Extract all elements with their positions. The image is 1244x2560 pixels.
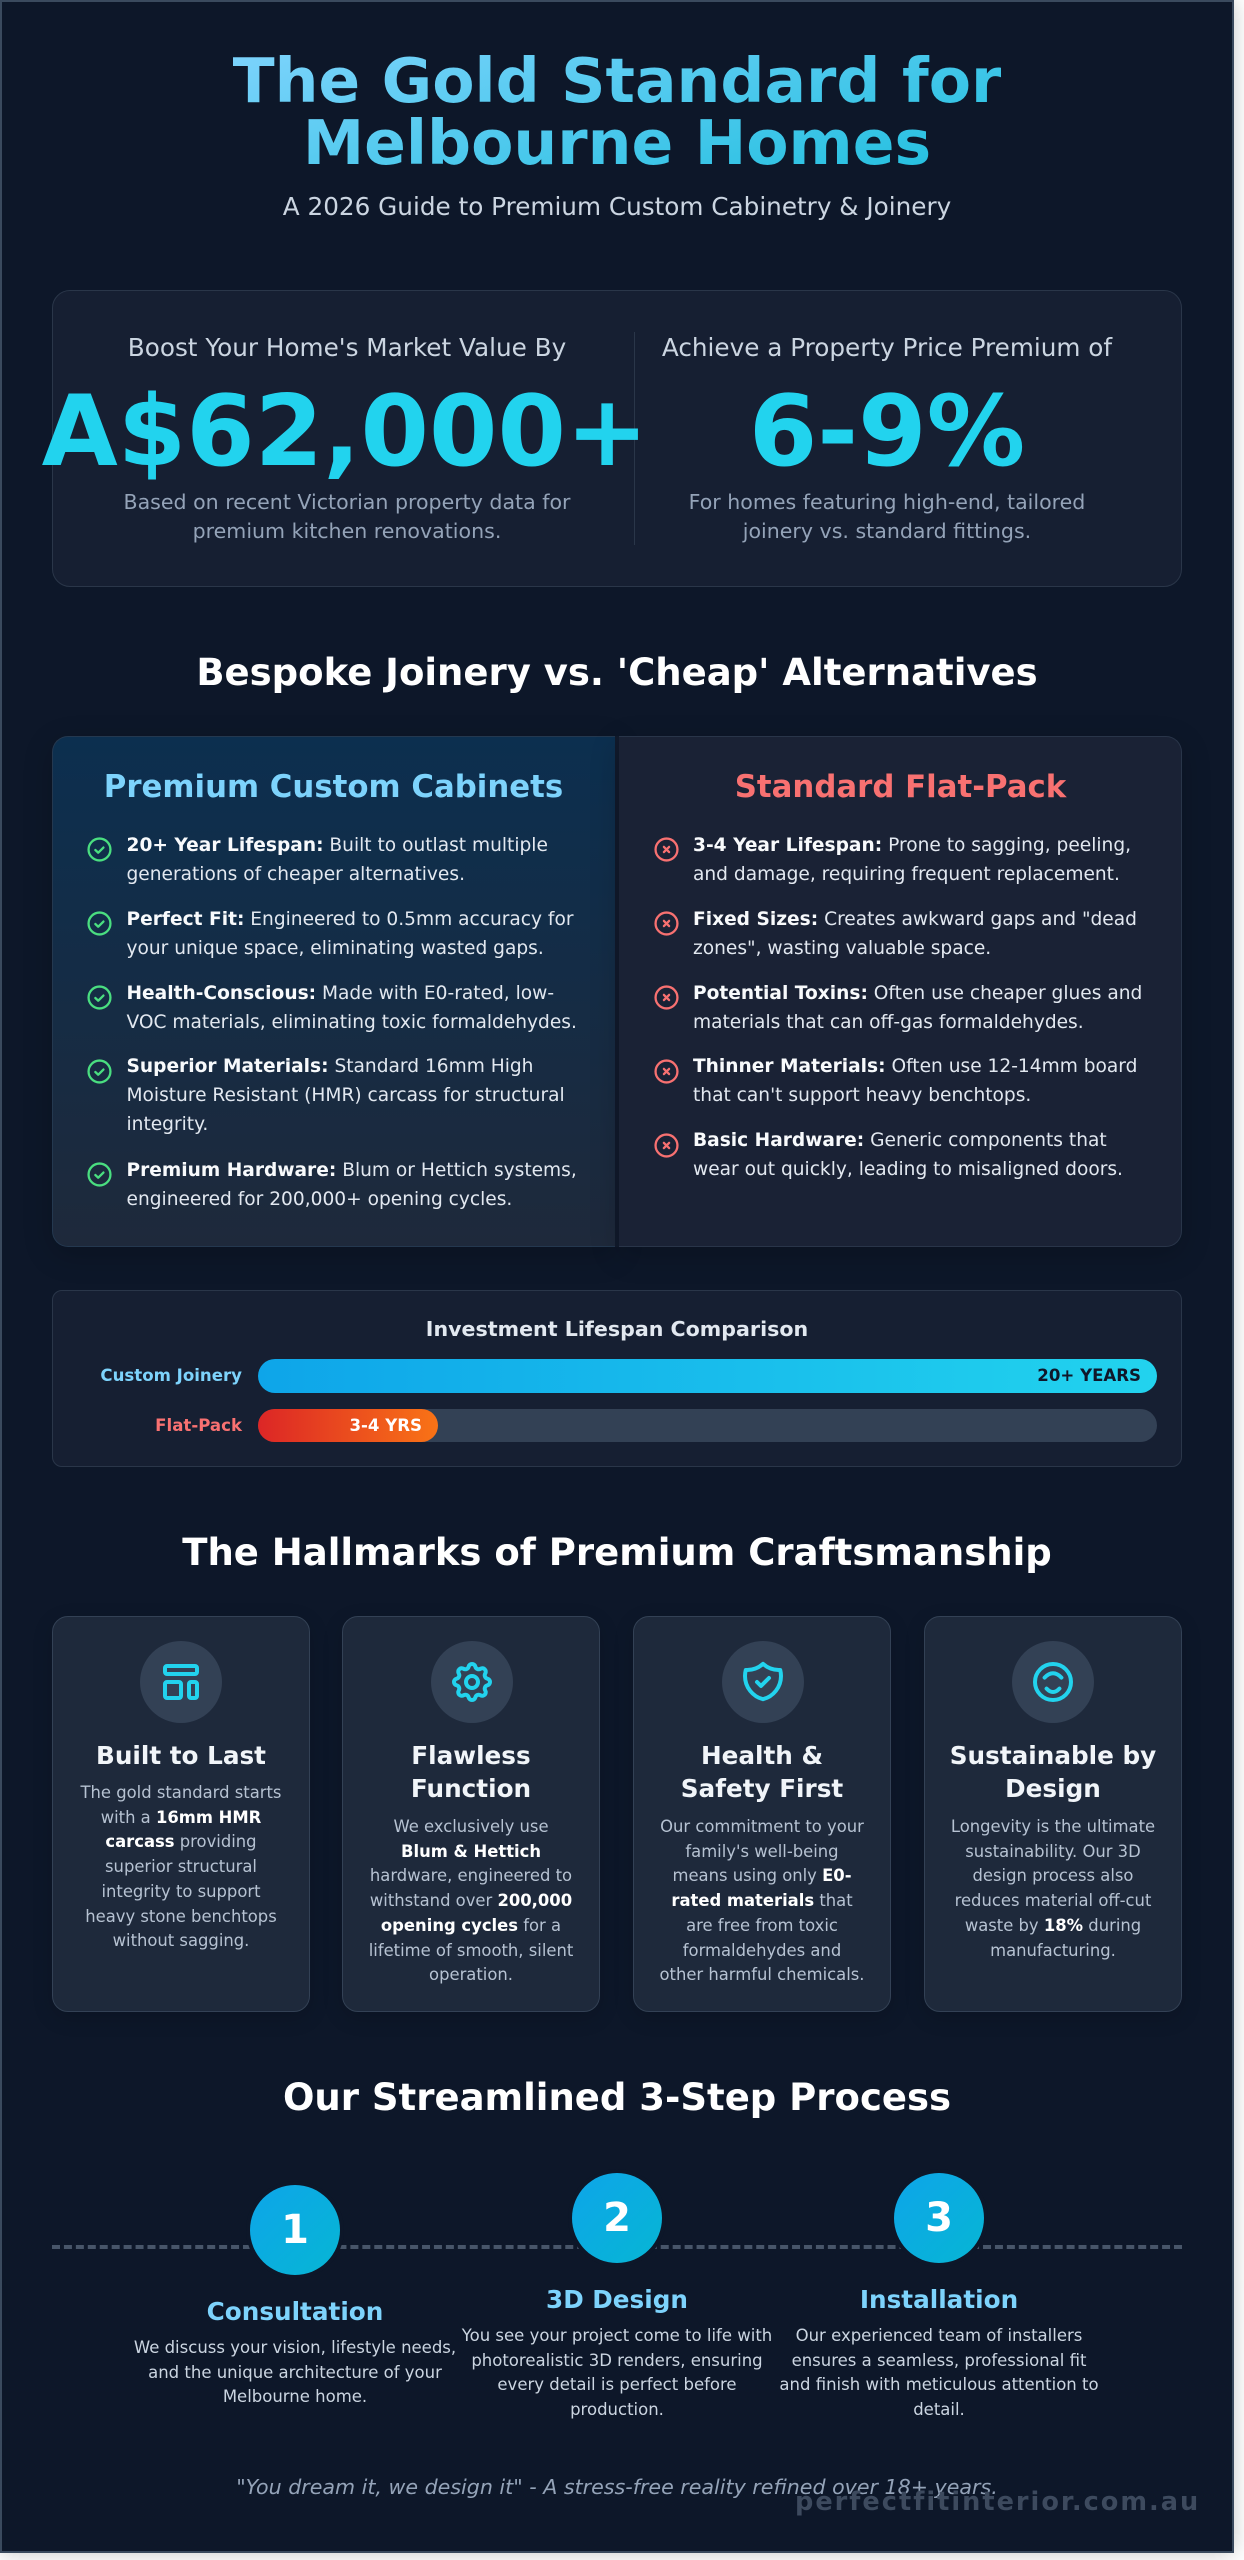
card text: sustainable: design process also xyxy=(973,1866,1133,1885)
icon: cross 1 xyxy=(654,837,679,862)
divider between stats xyxy=(634,332,635,545)
item: thinner: Thinner Materials: Often use 12-14mm board xyxy=(693,1056,1137,1077)
card title: flawless function: Flawless xyxy=(411,1741,531,1770)
item: materials: Moisture Resistant (HMR) carcass for structural xyxy=(126,1085,565,1106)
panel divider xyxy=(615,736,619,1247)
stat note: price premium: For homes featuring high-end, tailored xyxy=(689,490,1085,514)
card title: health and safety: Health & xyxy=(701,1741,823,1770)
step 1 text: and the unique architecture of your xyxy=(148,2363,442,2382)
card text: built to last: The gold standard starts xyxy=(81,1783,281,1802)
item: toxins: materials that can off-gas formaldehydes. xyxy=(693,1012,1084,1033)
heading: process: Our Streamlined 3-Step Process xyxy=(283,2076,951,2119)
benefit list: premium xyxy=(87,835,577,1210)
item: lifespan: and damage, requiring frequent replacement. xyxy=(693,864,1120,885)
item: lifespan: 20+ Year Lifespan: Built to outlast multiple xyxy=(126,835,548,856)
card text: health and safety: other harmful chemicals. xyxy=(659,1965,864,1984)
icon: cross 4 xyxy=(654,1059,679,1084)
icon: check 3 xyxy=(87,985,112,1010)
card title: built to last: Built to Last xyxy=(96,1741,266,1770)
item: hardware xyxy=(693,1130,1123,1180)
icon: cross 2 xyxy=(654,911,679,936)
card text: health and safety: means using only E0- xyxy=(672,1866,852,1885)
panel: standard flat-pack xyxy=(619,736,1182,1247)
step 3 text xyxy=(779,2326,1099,2419)
icon: check 1 xyxy=(87,837,112,862)
card text: flawless function: opening cycles for a xyxy=(381,1916,561,1935)
card text: flawless function xyxy=(369,1817,573,1984)
stat heading: price premium: Achieve a Property Price Premium of xyxy=(662,333,1112,362)
card title: sustainable: Design xyxy=(1005,1774,1101,1803)
stat note: price premium xyxy=(689,490,1085,543)
item: fit xyxy=(126,909,574,959)
item: health: VOC materials, eliminating toxic formaldehydes. xyxy=(126,1012,577,1033)
bar track: flat-pack xyxy=(258,1409,1157,1442)
title: The Gold Standard for xyxy=(233,45,1001,117)
item: sizes: zones", wasting valuable space. xyxy=(693,938,991,959)
icon: cross 3 xyxy=(654,985,679,1010)
item: hardware: wear out quickly, leading to misaligned doors. xyxy=(693,1159,1123,1180)
item: materials xyxy=(126,1056,565,1135)
step 2 title: 3D Design xyxy=(546,2285,688,2314)
card text: flawless function: withstand over 200,000 xyxy=(370,1891,572,1910)
step 3 text: Our experienced team of installers xyxy=(796,2326,1082,2345)
card text: flawless function: lifetime of smooth, silent xyxy=(369,1941,573,1960)
icon: recycle circle xyxy=(1012,1641,1094,1723)
title xyxy=(233,45,1001,179)
card title: sustainable xyxy=(950,1741,1156,1803)
step 2 text: every detail is perfect before xyxy=(497,2375,737,2394)
card text: sustainable: manufacturing. xyxy=(990,1941,1116,1960)
column heading: flat-pack: Standard Flat-Pack xyxy=(735,769,1066,805)
item: sizes xyxy=(693,909,1137,959)
icon: check 5 xyxy=(87,1162,112,1187)
heading: hallmarks: The Hallmarks of Premium Craftsmanship xyxy=(182,1531,1052,1574)
card text: health and safety: family's well-being xyxy=(685,1842,839,1861)
step 2 text: photorealistic 3D renders, ensuring xyxy=(471,2351,763,2370)
card text: health and safety: are free from toxic xyxy=(686,1916,838,1935)
card text: flawless function: Blum & Hettich xyxy=(401,1842,541,1861)
step 3 text: ensures a seamless, professional fit xyxy=(792,2351,1086,2370)
card text: built to last: integrity to support xyxy=(101,1882,261,1901)
panel: market value stats xyxy=(52,290,1182,587)
process dashed connector xyxy=(52,2245,1182,2249)
card text: health and safety: Our commitment to your xyxy=(660,1817,864,1836)
item: lifespan xyxy=(126,835,548,885)
stat note: market value: Based on recent Victorian property data for xyxy=(123,490,570,514)
icon: cross 5 xyxy=(654,1133,679,1158)
step 1 title: Consultation xyxy=(207,2297,383,2326)
panel: health and safety xyxy=(633,1616,891,2012)
card title: flawless function xyxy=(411,1741,531,1803)
card title: sustainable: Sustainable by xyxy=(950,1741,1156,1770)
card title: health and safety xyxy=(681,1741,843,1803)
card text: sustainable: reduces material off-cut xyxy=(955,1891,1151,1910)
label: flat-pack: Flat-Pack xyxy=(155,1416,242,1435)
stat value: A$62,000+: A$62,000+ xyxy=(42,375,648,489)
label: custom joinery: Custom Joinery xyxy=(100,1366,242,1385)
panel: built to last xyxy=(52,1616,310,2012)
icon: shield xyxy=(722,1641,804,1723)
card text: built to last: carcass providing xyxy=(105,1832,257,1851)
item: materials: Superior Materials: Standard 16mm High xyxy=(126,1056,533,1077)
card text: flawless function: operation. xyxy=(429,1965,513,1984)
card title: health and safety: Safety First xyxy=(681,1774,843,1803)
column heading: premium: Premium Custom Cabinets xyxy=(104,769,563,805)
drawback list: flat-pack xyxy=(654,835,1142,1180)
card title: flawless function: Function xyxy=(411,1774,531,1803)
step 2 text: You see your project come to life with xyxy=(462,2326,772,2345)
watermark: perfectfitinterior.com.au xyxy=(795,2487,1200,2517)
card text: built to last: without sagging. xyxy=(113,1931,249,1950)
item: thinner: that can't support heavy benchtops. xyxy=(693,1085,1031,1106)
step 1 number xyxy=(250,2185,340,2275)
closing quote: "You dream it, we design it" - A stress-free reality refined over 18+ years. xyxy=(236,2475,998,2499)
step 3 title: Installation xyxy=(860,2285,1018,2314)
card text: built to last: superior structural xyxy=(105,1857,257,1876)
panel: flawless function xyxy=(342,1616,600,2012)
item: lifespan xyxy=(693,835,1131,885)
card text: sustainable: waste by 18% during xyxy=(965,1916,1141,1935)
item: health xyxy=(126,983,577,1033)
step 1 text xyxy=(134,2338,456,2406)
step 3 number: 3 xyxy=(925,2195,953,2241)
step 2 text xyxy=(462,2326,772,2419)
card text: health and safety xyxy=(659,1817,864,1984)
step 2 number xyxy=(572,2173,662,2263)
stat note: market value: premium kitchen renovations. xyxy=(193,519,501,543)
item: toxins xyxy=(693,983,1142,1033)
card text: built to last xyxy=(80,1783,281,1950)
item: lifespan: 3-4 Year Lifespan: Prone to sagging, peeling, xyxy=(693,835,1131,856)
chart title: Investment Lifespan Comparison xyxy=(426,1317,808,1341)
step 2 text: production. xyxy=(570,2400,664,2419)
card text: flawless function: We exclusively use xyxy=(393,1817,549,1836)
stat note: price premium: joinery vs. standard fittings. xyxy=(743,519,1031,543)
item: lifespan: generations of cheaper alternatives. xyxy=(126,864,465,885)
card text: sustainable xyxy=(951,1817,1155,1960)
card text: health and safety: formaldehydes and xyxy=(683,1941,841,1960)
bar value: 3-4 YRS xyxy=(349,1416,422,1435)
item: materials: integrity. xyxy=(126,1114,208,1135)
stat value: 6-9%: 6-9% xyxy=(749,375,1025,489)
item: health: Health-Conscious: Made with E0-rated, low- xyxy=(126,983,554,1004)
item: toxins: Potential Toxins: Often use cheaper glues and xyxy=(693,983,1142,1004)
subtitle: A 2026 Guide to Premium Custom Cabinetry & Joinery xyxy=(283,192,951,221)
item: fit: Perfect Fit: Engineered to 0.5mm accuracy for xyxy=(126,909,574,930)
step 1 text: Melbourne home. xyxy=(223,2387,367,2406)
step 2 number: 2 xyxy=(603,2195,631,2241)
item: sizes: Fixed Sizes: Creates awkward gaps and "dead xyxy=(693,909,1137,930)
stat note: market value xyxy=(123,490,570,543)
bar: custom joinery xyxy=(258,1359,1157,1393)
panel: premium custom cabinets xyxy=(52,736,615,1247)
item: hardware xyxy=(126,1160,577,1210)
card text: flawless function: hardware, engineered to xyxy=(370,1866,572,1885)
icon: layout xyxy=(140,1641,222,1723)
stat heading: market value: Boost Your Home's Market Value By xyxy=(128,333,566,362)
card text: sustainable: sustainability. Our 3D xyxy=(965,1842,1141,1861)
item: thinner xyxy=(693,1056,1137,1106)
bar value: 20+ YEARS xyxy=(1037,1366,1141,1385)
card text: health and safety: rated materials that xyxy=(671,1891,853,1910)
icon: check 4 xyxy=(87,1059,112,1084)
step 1 number: 1 xyxy=(281,2207,309,2253)
item: hardware: Premium Hardware: Blum or Hettich systems, xyxy=(126,1160,577,1181)
panel: sustainable xyxy=(924,1616,1182,2012)
card text: built to last: heavy stone benchtops xyxy=(85,1907,277,1926)
item: fit: your unique space, eliminating wasted gaps. xyxy=(126,938,544,959)
card text: sustainable: Longevity is the ultimate xyxy=(951,1817,1155,1836)
bar fill: flat-pack xyxy=(258,1409,438,1442)
title: Melbourne Homes xyxy=(303,107,931,179)
icon: gear xyxy=(431,1641,513,1723)
item: hardware: Basic Hardware: Generic components that xyxy=(693,1130,1107,1151)
step 3 text: and finish with meticulous attention to xyxy=(779,2375,1099,2394)
icon: check 2 xyxy=(87,911,112,936)
panel: investment lifespan comparison xyxy=(52,1290,1182,1467)
item: hardware: engineered for 200,000+ opening cycles. xyxy=(126,1189,512,1210)
heading: comparison: Bespoke Joinery vs. 'Cheap' Alternatives xyxy=(196,651,1038,694)
step 3 text: detail. xyxy=(913,2400,965,2419)
step 1 text: We discuss your vision, lifestyle needs, xyxy=(134,2338,456,2357)
step 3 number xyxy=(894,2173,984,2263)
card text: built to last: with a 16mm HMR xyxy=(101,1808,261,1827)
